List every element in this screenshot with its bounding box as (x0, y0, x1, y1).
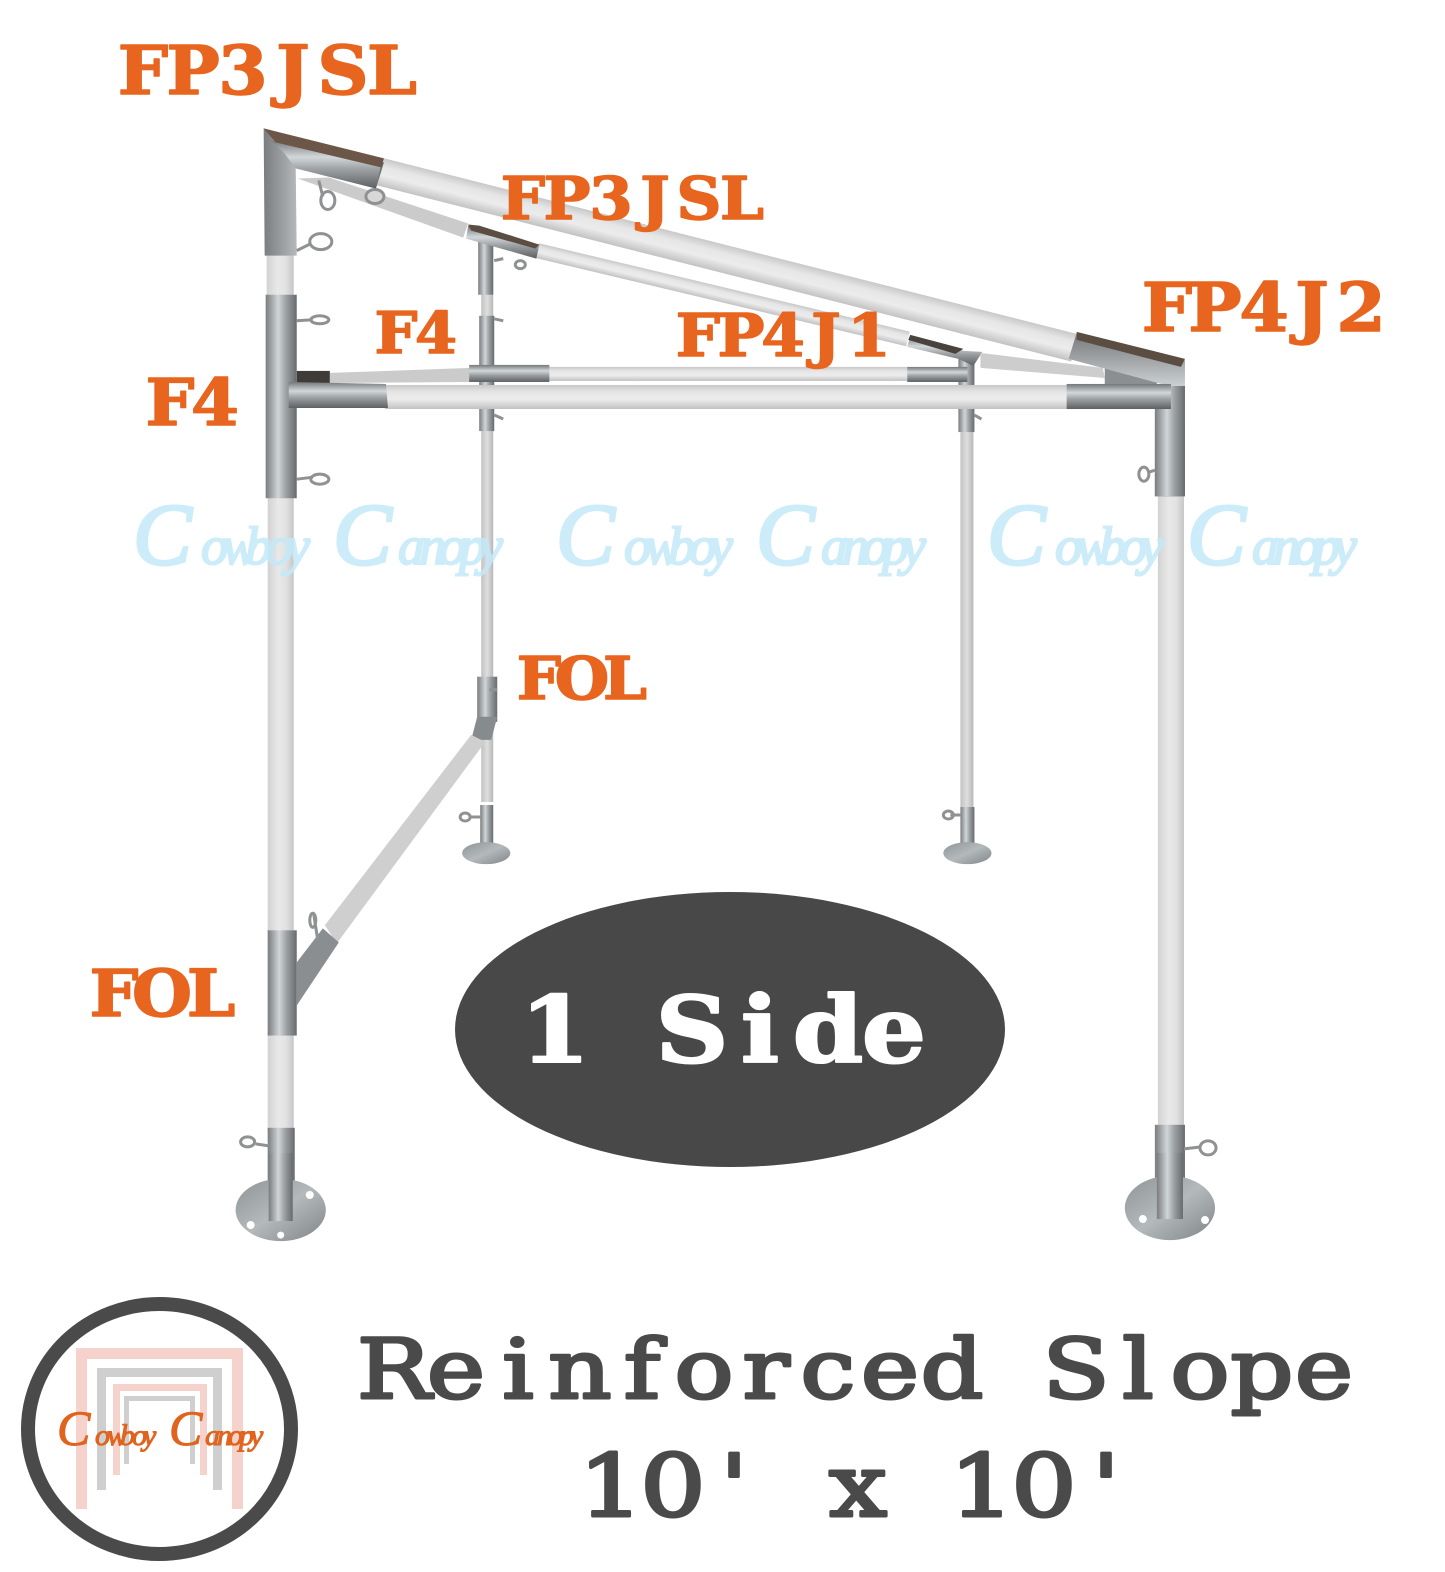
top sloped pipe (375, 158, 1078, 361)
watermark: Cowboy Canopy: owboy (1055, 516, 1164, 576)
watermark: Cowboy Canopy: C (756, 487, 816, 584)
label: FP4J2: FP4J2 (1142, 269, 1386, 347)
watermark: Cowboy Canopy: anopy (821, 516, 926, 576)
watermark: Cowboy Canopy: anopy (398, 516, 503, 576)
rear left post (460, 239, 510, 864)
watermark: Cowboy Canopy: C (333, 487, 393, 584)
logo: Cowboy Canopy: C (169, 1400, 203, 1456)
label: FOL front post: FOL (89, 955, 235, 1032)
logo: Cowboy Canopy: owboy (95, 1419, 157, 1452)
front left post (236, 128, 388, 1241)
label: FOL rear post: FOL (517, 645, 647, 714)
rear right post (943, 356, 991, 864)
watermark: Cowboy Canopy: C (1187, 487, 1247, 584)
title: Reinforced Slope: Reinforced Slope (357, 1323, 1353, 1418)
badge: 1 Side (455, 892, 1005, 1167)
watermark: Cowboy Canopy (133, 487, 1357, 584)
subtitle: 10' x 10': 10' x 10' (578, 1437, 1120, 1537)
logo: Cowboy Canopy: C (57, 1400, 91, 1456)
label: FP3JSL rear rail: FP3JSL (501, 165, 764, 234)
front right post (1067, 332, 1216, 1240)
logo: Cowboy Canopy: anopy (205, 1419, 264, 1452)
watermark: Cowboy Canopy: owboy (201, 516, 310, 576)
watermark: Cowboy Canopy: C (556, 487, 616, 584)
watermark: Cowboy Canopy: C (987, 487, 1047, 584)
rear beam (297, 365, 967, 383)
label: F4 left: F4 (146, 364, 239, 441)
label: F4 inner: F4 (375, 300, 457, 367)
label: FP3JSL top left: FP3JSL (118, 32, 417, 110)
front horizontal beam (385, 385, 1071, 409)
watermark: Cowboy Canopy: C (133, 487, 193, 584)
watermark: Cowboy Canopy: owboy (624, 516, 733, 576)
frame: canopy structure photo (236, 128, 1216, 1241)
logo: Cowboy Canopy (28, 1304, 291, 1554)
diagonal brace (297, 735, 485, 1006)
label: FP4J1: FP4J1 (676, 302, 891, 371)
rear slope rail (298, 177, 1160, 386)
badge: 1 Side: 1 Side (520, 975, 926, 1084)
watermark: Cowboy Canopy: anopy (1252, 516, 1357, 576)
